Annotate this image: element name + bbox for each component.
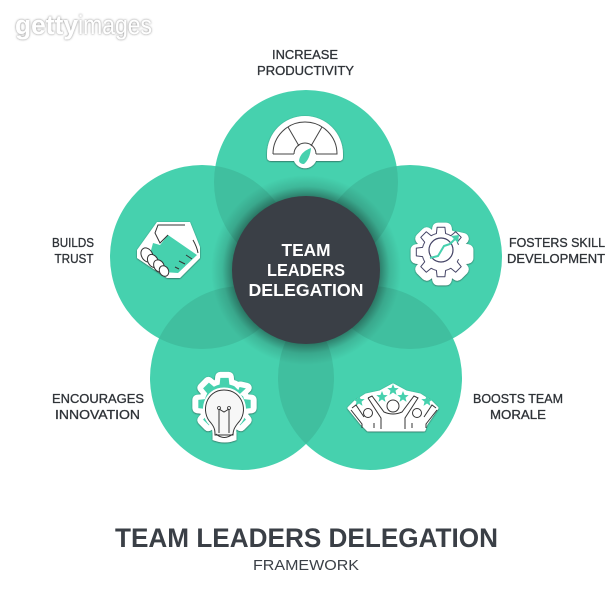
label: boosts team morale: [473, 392, 563, 422]
label: increase productivity: INCREASE: [272, 48, 338, 62]
label: boosts team morale: MORALE: [490, 408, 546, 422]
center shadow: [211, 175, 401, 365]
watermark: gettyimages: images: [78, 10, 152, 40]
circle: fosters skill development: [318, 165, 502, 349]
label: encourages innovation: [52, 392, 144, 422]
label: builds trust: BUILDS: [52, 236, 94, 250]
label: fosters skill development: DEVELOPMENT: [507, 252, 605, 266]
center title: TEAM: [282, 240, 330, 260]
circle: increase productivity: [214, 90, 398, 274]
circle: builds trust: [110, 165, 294, 349]
label: builds trust: TRUST: [54, 252, 94, 266]
watermark: gettyimages: [15, 10, 152, 40]
center title: LEADERS: [267, 260, 345, 280]
label: encourages innovation: ENCOURAGES: [52, 392, 144, 406]
main title: TEAM LEADERS DELEGATION: [115, 523, 498, 553]
center title: DELEGATION: [248, 280, 364, 300]
circle: boosts team morale: [278, 286, 462, 470]
icon: light bulb with gear: [197, 377, 252, 441]
icon: gear with growth arrow: [416, 227, 468, 280]
subtitle: FRAMEWORK: [253, 558, 359, 574]
watermark: gettyimages: getty: [15, 10, 78, 40]
label: fosters skill development: FOSTERS SKILL: [509, 236, 605, 250]
label: increase productivity: [257, 48, 355, 78]
label: increase productivity: PRODUCTIVITY: [257, 64, 355, 78]
center title: [248, 240, 364, 300]
icon: speedometer gauge: [267, 116, 343, 168]
venn circles: [110, 90, 502, 470]
circle: encourages innovation: [150, 286, 334, 470]
label: encourages innovation: INNOVATION: [55, 408, 140, 422]
label: boosts team morale: BOOSTS TEAM: [473, 392, 563, 406]
icon: handshake: [137, 222, 200, 278]
label: builds trust: [52, 236, 94, 266]
label: fosters skill development: [507, 236, 605, 266]
circle overlaps: [159, 166, 453, 444]
center circle: [232, 196, 380, 344]
icon: team celebrating with stars: [349, 384, 437, 430]
